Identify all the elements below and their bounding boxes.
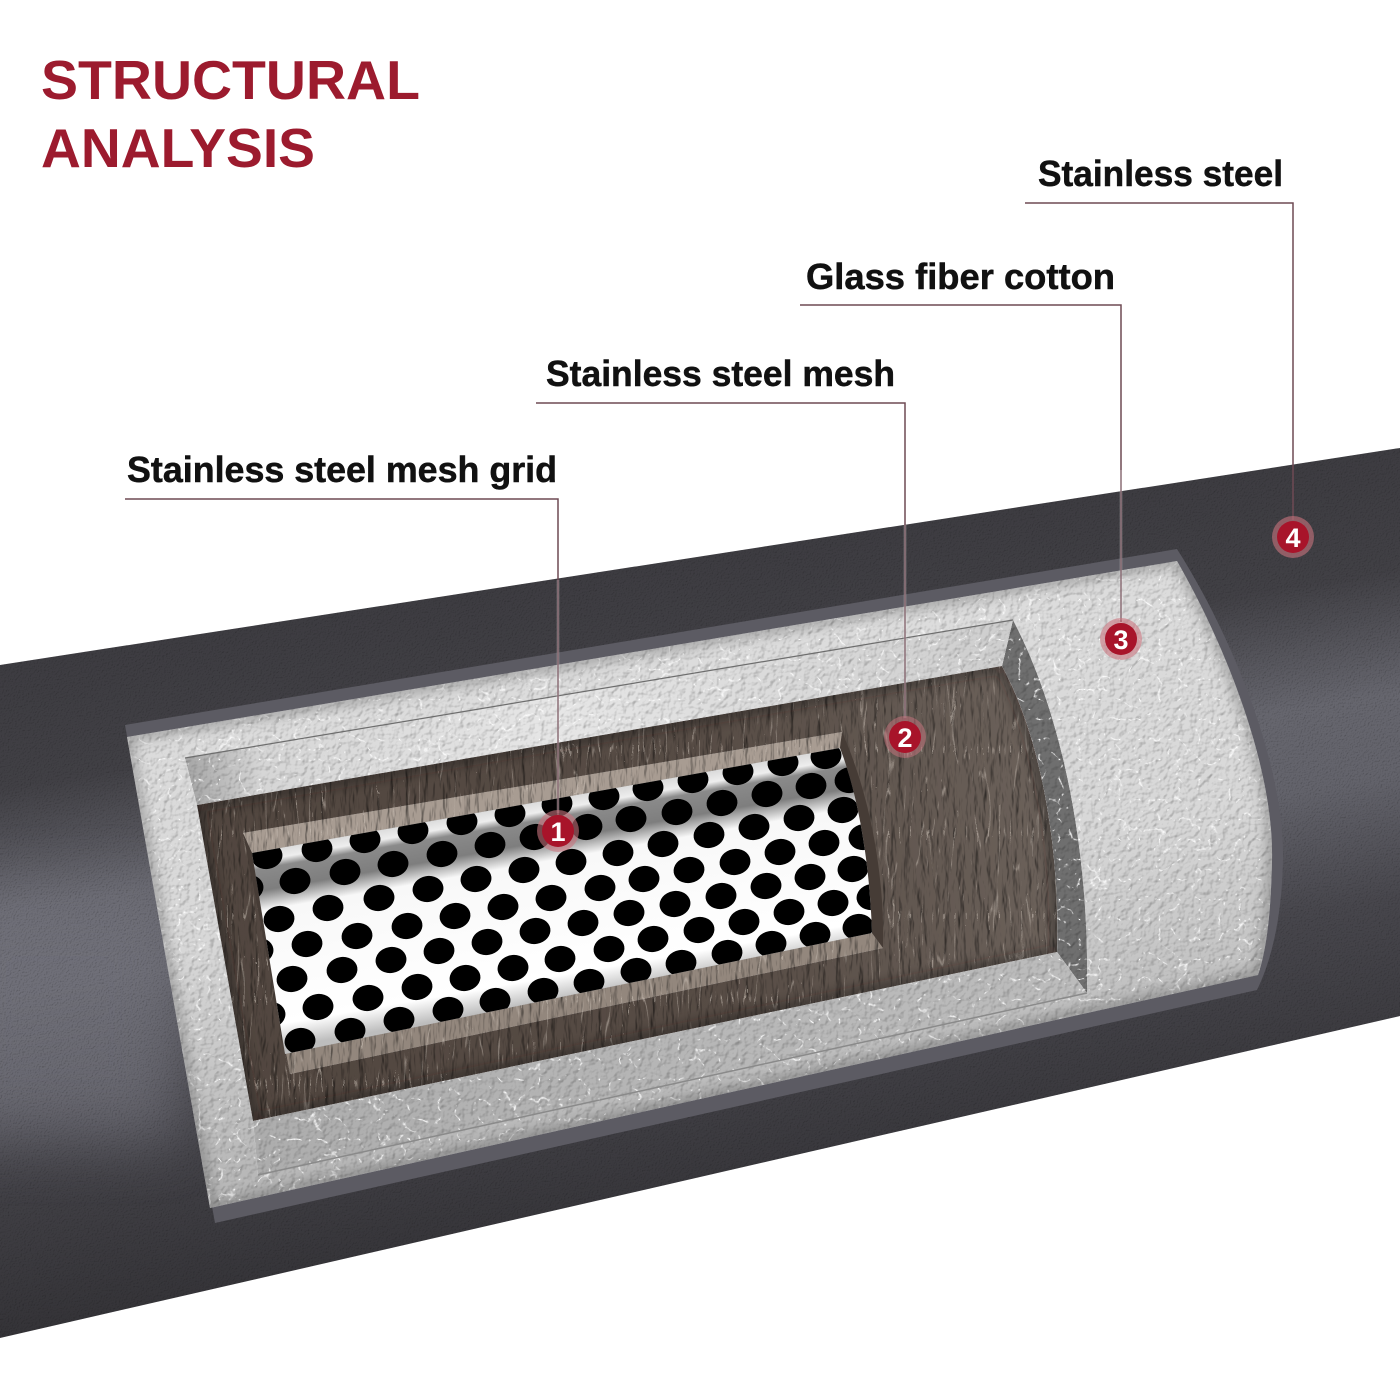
- callout 1: stainless steel mesh grid: Stainless steel mesh grid: [127, 449, 557, 490]
- callout 1: stainless steel mesh grid: [125, 449, 579, 852]
- callout 2: stainless steel mesh: 2: [897, 723, 913, 753]
- callout 1: stainless steel mesh grid: 1: [550, 817, 566, 847]
- layer: perforated mesh grid: [230, 741, 890, 1056]
- callout 3: glass fiber cotton: [800, 256, 1142, 660]
- layer: glass fiber cotton foil: [127, 561, 1272, 1208]
- callout 2: stainless steel mesh: Stainless steel mesh: [546, 353, 895, 394]
- callout 4: stainless steel: 4: [1285, 523, 1301, 553]
- callout 2: stainless steel mesh: [536, 353, 926, 758]
- callout 4: stainless steel: Stainless steel: [1038, 153, 1283, 194]
- layer: recessed foil bevels: [185, 620, 1087, 1175]
- cutaway frame: [125, 549, 1283, 1223]
- callout 3: glass fiber cotton: Glass fiber cotton: [806, 256, 1115, 297]
- callout 3: glass fiber cotton: 3: [1113, 625, 1129, 655]
- tube: stainless steel outer shell: [0, 448, 1400, 1338]
- layer: stainless steel mesh (brown fiber): [197, 666, 1057, 1121]
- title: STRUCTURAL: [41, 49, 420, 111]
- title: ANALYSIS: [41, 117, 315, 179]
- layer: taupe mesh border: [243, 732, 883, 1074]
- callout 4: stainless steel: [1025, 153, 1314, 558]
- title: [41, 49, 420, 179]
